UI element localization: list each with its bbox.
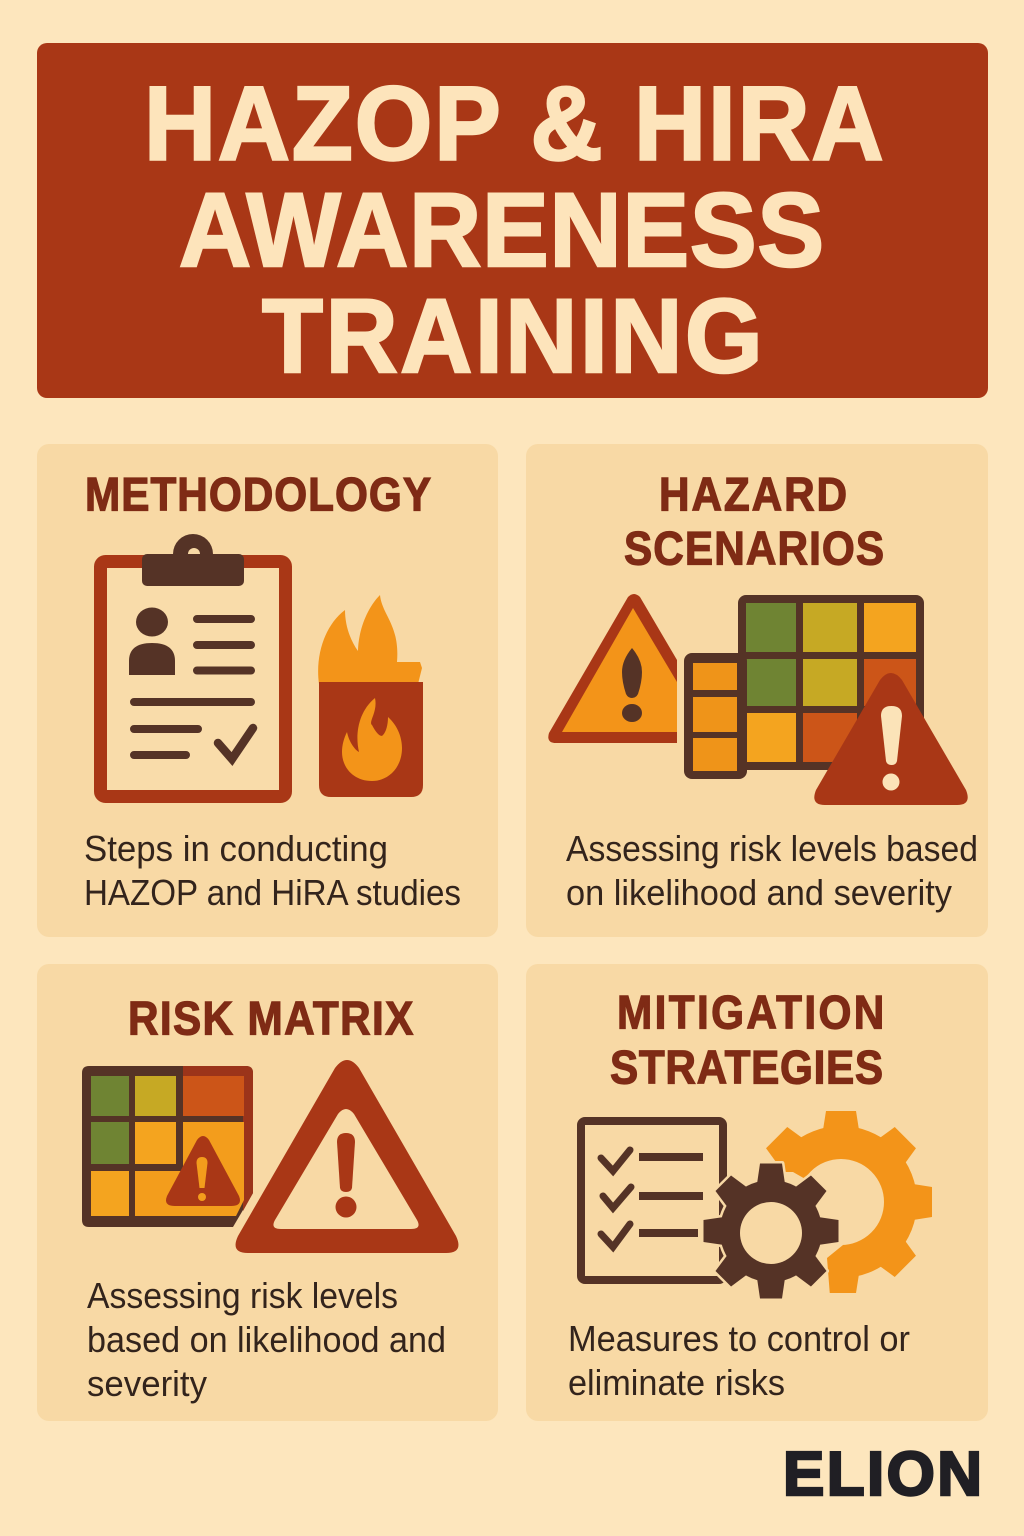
panel: risk matrix [37, 964, 498, 1421]
icon: flame container [318, 595, 423, 797]
icon: risk grid small [82, 1066, 253, 1227]
description: methodology: Steps in conducting [84, 828, 388, 869]
title banner: AWARENESS [179, 171, 824, 289]
description: methodology [84, 828, 461, 913]
description: methodology: HAZOP and HiRA studies [84, 872, 461, 913]
icon: clipboard checklist [100, 534, 286, 796]
icon: red warning triangle [814, 673, 968, 805]
panel: hazard scenarios [526, 444, 988, 937]
title banner [37, 43, 988, 398]
icon: risk grid [684, 595, 924, 779]
icon: checklist [581, 1121, 723, 1280]
title banner: HAZOP & HIRA [144, 64, 884, 182]
panel: methodology [37, 444, 498, 937]
description: risk matrix: severity [87, 1363, 207, 1404]
heading: hazard scenarios: SCENARIOS [624, 524, 884, 575]
description: mitigation strategies: eliminate risks [568, 1362, 785, 1403]
heading: risk matrix: RISK MATRIX [128, 994, 413, 1045]
title banner: TRAINING [262, 277, 763, 395]
icon: dark gear [704, 1164, 838, 1298]
panel: mitigation strategies [526, 964, 988, 1421]
description: risk matrix [87, 1275, 446, 1404]
heading: mitigation strategies: MITIGATION [617, 988, 884, 1039]
heading: methodology: METHODOLOGY [85, 470, 431, 521]
description: risk matrix: based on likelihood and [87, 1319, 446, 1360]
icon: orange gear [735, 1111, 932, 1296]
heading: hazard scenarios: HAZARD [659, 470, 847, 521]
logo: ELION: ELION [783, 1440, 982, 1509]
description: hazard scenarios: on likelihood and severity [566, 872, 952, 913]
description: mitigation strategies [568, 1318, 910, 1403]
description: hazard scenarios [566, 828, 978, 913]
description: mitigation strategies: Measures to control or [568, 1318, 910, 1359]
heading: hazard scenarios [624, 470, 884, 575]
icon: warning triangle [548, 594, 677, 743]
heading: mitigation strategies [610, 988, 884, 1094]
heading: mitigation strategies: STRATEGIES [610, 1043, 883, 1094]
description: risk matrix: Assessing risk levels [87, 1275, 398, 1316]
icon: large warning triangle [236, 1060, 458, 1253]
description: hazard scenarios: Assessing risk levels based [566, 828, 978, 869]
